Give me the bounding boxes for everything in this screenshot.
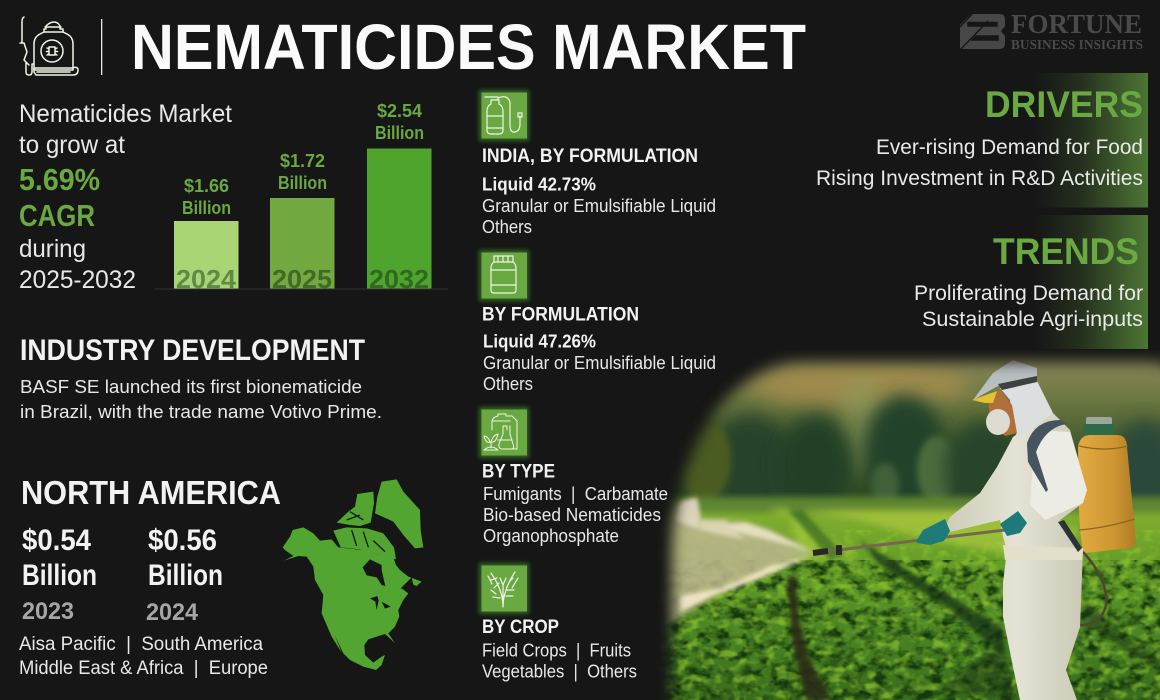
north america values: Aisa Pacific | South America (19, 634, 263, 655)
segment: by formulation: Liquid 47.26% (483, 332, 596, 352)
bar 2032: $2.54 (377, 101, 422, 121)
bar 2025: Billion (278, 173, 327, 193)
growth statement: 2025-2032 (19, 266, 136, 294)
segment: by formulation: Others (483, 374, 533, 394)
title: NEMATICIDES MARKET (131, 11, 806, 83)
header divider (101, 19, 102, 75)
segment: by crop: Vegetables | Others (482, 662, 637, 682)
north america values: 2023 (22, 598, 74, 625)
logo: Fortune Business Insights: BUSINESS INSIGHTS (1011, 37, 1143, 52)
panel: drivers: Ever-rising Demand for Food (876, 136, 1143, 159)
north america values: Billion (22, 559, 97, 592)
spray mist (660, 498, 813, 625)
segment: India by formulation: INDIA, BY FORMULATION (482, 145, 698, 167)
segment: by type: Bio-based Nematicides (483, 505, 661, 525)
icon: jar (479, 250, 529, 301)
segment: India by formulation: Granular or Emulsifiable Liquid (482, 196, 716, 216)
segment: by crop (479, 563, 637, 682)
icon: wheat (479, 563, 529, 614)
crop rows (650, 497, 1160, 700)
bar 2032 (367, 101, 432, 294)
segment: by type (479, 407, 668, 546)
spray tank (1078, 417, 1136, 625)
panel: trends: Proliferating Demand for (914, 282, 1143, 305)
growth statement: to grow at (19, 131, 125, 159)
bar 2024: Billion (182, 198, 231, 218)
worker in protective suit (947, 360, 1087, 700)
segment: India by formulation: Others (482, 217, 532, 237)
panel: drivers (816, 73, 1148, 208)
segment: by crop: Field Crops | Fruits (482, 640, 631, 660)
bar 2025: $1.72 (280, 151, 325, 171)
panel: drivers: Rising Investment in R&D Activities (816, 167, 1143, 190)
bar chart: market size (155, 101, 448, 294)
north america values: Billion (148, 559, 223, 592)
growth statement: during (19, 235, 86, 263)
bar 2025: 2025 (272, 264, 332, 294)
growth statement (19, 100, 232, 294)
industry development: INDUSTRY DEVELOPMENT (20, 334, 365, 367)
segment: by formulation: Granular or Emulsifiable Liquid (483, 353, 716, 373)
map: North America (283, 479, 423, 670)
bar 2032: Billion (375, 123, 424, 143)
north america values: $0.54 (22, 524, 91, 557)
background trees and sunset sky (672, 352, 1160, 501)
growth statement: CAGR (19, 198, 95, 233)
photo: worker spraying crop field (650, 350, 1160, 700)
bar 2024 (174, 176, 238, 294)
north america values: Middle East & Africa | Europe (19, 658, 268, 679)
bar 2025 (270, 151, 334, 294)
segment: by type: Fumigants | Carbamate (483, 484, 668, 504)
spray wand and gloves (813, 511, 1027, 555)
panel: trends: Sustainable Agri-inputs (922, 308, 1143, 331)
segment: India by formulation (479, 90, 716, 237)
panel: trends (914, 215, 1148, 349)
segment: by formulation: BY FORMULATION (482, 304, 639, 326)
logo: Fortune Business Insights: FORTUNE (1011, 9, 1142, 39)
industry development: BASF SE launched its first bionematicide (20, 377, 362, 397)
segment: India by formulation: Liquid 42.73% (482, 174, 596, 194)
icon: chemical containers and plant (479, 407, 529, 458)
north america values (19, 474, 281, 679)
segment: by type: BY TYPE (482, 460, 555, 482)
north america values: 2024 (146, 599, 199, 626)
panel: drivers: DRIVERS (985, 84, 1143, 125)
bar 2024: $1.66 (184, 176, 229, 196)
growth statement: Nematicides Market (19, 100, 232, 128)
north america values: $0.56 (148, 524, 217, 557)
bar 2032: 2032 (369, 264, 429, 294)
icon: spray bottle (479, 90, 529, 141)
header icon: backpack sprayer (20, 17, 78, 75)
panel: trends: TRENDS (993, 231, 1139, 272)
segment: by crop: BY CROP (482, 616, 559, 638)
industry development: in Brazil, with the trade name Votivo Prime. (20, 402, 382, 422)
segment: by type: Organophosphate (483, 526, 619, 546)
industry development (20, 334, 382, 422)
growth statement: 5.69% (19, 162, 100, 197)
segment: by formulation (479, 250, 716, 394)
bar 2024: 2024 (176, 264, 237, 294)
north america values: NORTH AMERICA (21, 474, 281, 511)
logo: Fortune Business Insights (960, 9, 1143, 52)
